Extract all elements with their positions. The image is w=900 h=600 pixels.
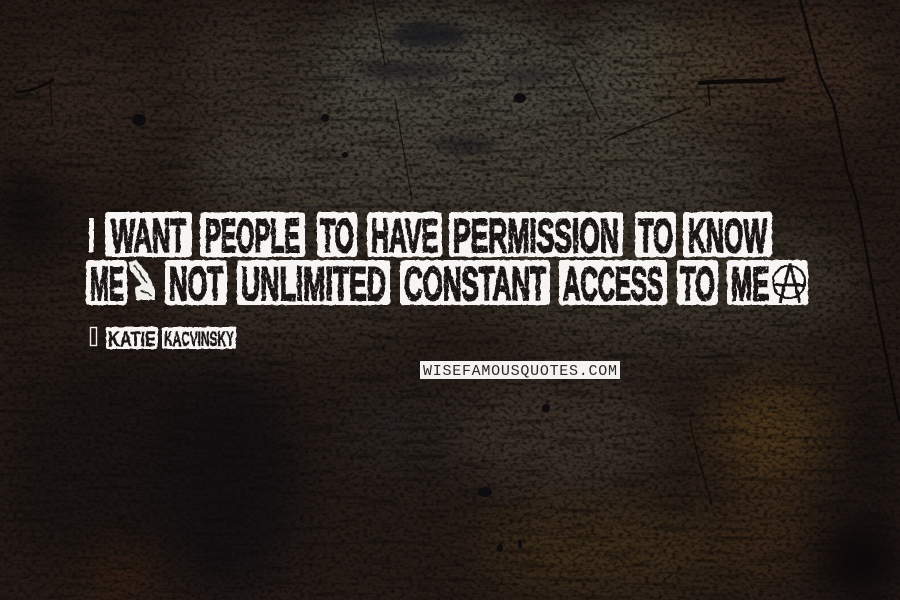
word: UNLIMITED: UNLIMITED — [241, 257, 386, 310]
word: WANT — [105, 209, 192, 262]
word: ME: ME — [90, 257, 124, 310]
author: Kacvinsky — [162, 327, 236, 351]
watermark: wisefamousquotes.com: WISEFAMOUSQUOTES.COM — [423, 363, 617, 380]
quote text — [86, 209, 808, 310]
word: PERMISSION — [449, 209, 623, 262]
word: ACCESS: ACCESS — [563, 257, 663, 310]
word: TO: TO — [680, 257, 715, 310]
word: NOT: NOT — [169, 257, 223, 310]
word: ME — [86, 257, 127, 310]
word: I — [89, 218, 94, 252]
attribution — [90, 327, 236, 351]
opening quote box — [90, 328, 96, 346]
word: KNOW: KNOW — [688, 209, 767, 262]
word: CONSTANT — [400, 257, 550, 310]
word: PEOPLE — [200, 209, 305, 262]
word: CONSTANT: CONSTANT — [404, 257, 546, 310]
word: PEOPLE: PEOPLE — [205, 209, 300, 262]
word: TO — [317, 209, 357, 262]
word: HAVE: HAVE — [371, 209, 438, 262]
word: HAVE — [367, 209, 442, 262]
word: TO: TO — [320, 209, 354, 262]
word: WANT: WANT — [111, 209, 186, 262]
author: Katie: KATIE — [108, 328, 156, 351]
word: ACCESS — [559, 257, 667, 310]
word: UNLIMITED — [237, 257, 390, 310]
word: KNOW — [683, 209, 772, 262]
word: ME with anarchy symbol: ME — [731, 257, 769, 310]
word: TO: TO — [638, 209, 673, 262]
comma — [129, 260, 155, 300]
word: NOT — [165, 257, 227, 310]
word: TO — [677, 257, 718, 310]
word: PERMISSION: PERMISSION — [453, 209, 619, 262]
author: Kacvinsky: KACVINSKY — [164, 328, 234, 351]
word: TO — [635, 209, 676, 262]
